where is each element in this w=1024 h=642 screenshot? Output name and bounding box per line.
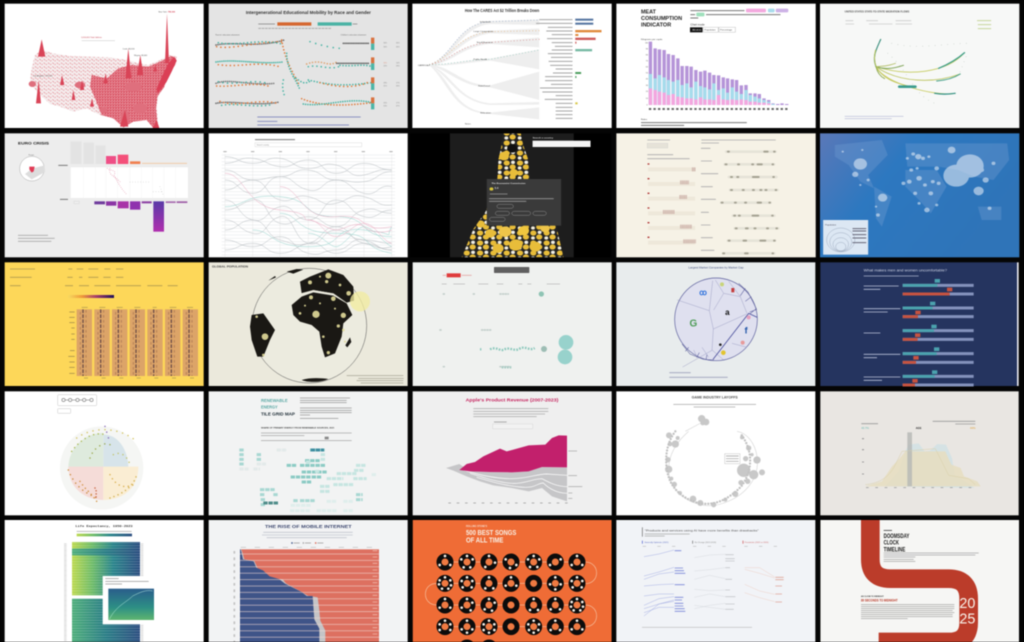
- row headings: [68, 312, 75, 373]
- notes: [641, 118, 747, 125]
- heading: What makes men and women uncomfortable?: [864, 268, 947, 272]
- chart mode selector: Population: [704, 29, 716, 32]
- callout: Wayne label: Wayne: 68,000: [134, 55, 148, 57]
- cluster row of teal glyphs: [480, 348, 535, 350]
- legend box: Population: [825, 223, 837, 226]
- stat columns: 29%: [383, 82, 387, 84]
- chart: year axis: [448, 502, 568, 504]
- heading: UNITED STATES STATE-TO-STATE MIGRATION FLOWS: [845, 10, 909, 13]
- panel: Largest Market Companies voronoi: [616, 262, 815, 386]
- chart: scatter panel: [71, 167, 188, 198]
- row labels and options: [10, 269, 178, 286]
- footnotes: [257, 117, 361, 125]
- tooltip panel: 5.4: [495, 187, 499, 190]
- chart: selected age band: [907, 432, 912, 486]
- stat columns: 14%: [396, 62, 400, 64]
- left stat: [861, 424, 878, 430]
- column heads: Pessimistic (2022 vs 2024): [745, 541, 769, 544]
- title rule: [641, 527, 643, 537]
- heading: TILE GRID MAP: [261, 412, 296, 418]
- year label: [959, 596, 975, 627]
- heading: Largest Market Companies by Market Cap: [688, 266, 744, 270]
- heading: "Products and services using AI have more benefits than drawbacks": [645, 528, 759, 532]
- chart: gray slopes: [694, 554, 725, 609]
- heading: ENERGY: [261, 405, 278, 411]
- branch labels: Small Business: [477, 42, 493, 44]
- notes: Notes: [641, 118, 647, 121]
- heading: Apple's Product Revenue (2007-2023): [466, 397, 559, 402]
- heading: [884, 533, 910, 553]
- search label: Search a country: [533, 137, 554, 140]
- legend box: [823, 220, 868, 255]
- heatmap: lower row texture: [72, 599, 140, 642]
- chart: population bubbles: [842, 147, 995, 217]
- stat columns: 17%: [396, 82, 400, 84]
- heading: TIMELINE: [884, 546, 906, 553]
- stat columns: 22%: [383, 66, 387, 68]
- heading: CLOCK: [884, 540, 899, 547]
- subheading: SHARE OF PRIMARY ENERGY FROM RENEWABLE SOURCES, 2021: [261, 427, 334, 430]
- connector curves: [425, 562, 597, 627]
- y axis ticks: 50: [646, 73, 648, 75]
- chart: iPhone area: [459, 435, 567, 472]
- panel: Renewable Energy tile grid map: [209, 391, 408, 515]
- y axis ticks: 10: [646, 98, 648, 100]
- branch labels: Public Health: [473, 58, 488, 61]
- tooltip: [725, 454, 740, 464]
- legend rule: [82, 40, 115, 42]
- outer halo: [60, 426, 143, 510]
- year label: 25: [959, 611, 975, 627]
- footnote: [845, 116, 903, 119]
- caption: [18, 235, 55, 241]
- map: Europe and Middle East: [300, 269, 354, 303]
- flow legend: [977, 21, 991, 29]
- map: metro blobs: [29, 81, 147, 127]
- big teal bubble 1: [559, 335, 573, 350]
- popup: [103, 576, 157, 624]
- heatmap: dark upper band: [72, 549, 140, 555]
- chart: heatmap columns: [77, 309, 198, 376]
- search input: [533, 141, 591, 147]
- chart: heatmap dark streaks: [83, 309, 189, 376]
- stat columns: 21%: [383, 86, 387, 88]
- chart: blue slopes: [644, 550, 674, 616]
- data points: [68, 426, 137, 501]
- panel: Euro Crisis: [5, 133, 204, 257]
- stat columns: 17%: [396, 102, 400, 104]
- panel: US population spike map: [5, 4, 204, 128]
- panel: circular sector scatter: [5, 391, 204, 515]
- panel: yellow heatmap: [5, 262, 204, 386]
- eyebrow: [884, 529, 892, 532]
- y axis ticks: 40: [646, 79, 648, 81]
- panel: navy gender stereotype bars: [820, 262, 1019, 386]
- axis ticks: [643, 545, 779, 547]
- chart: top bars: [71, 141, 187, 164]
- heading: Intergenerational Educational Mobility by Race and Gender: [246, 10, 371, 15]
- panel: CARES Act tree: [412, 4, 612, 128]
- heading: RENEWABLE: [261, 398, 288, 404]
- branch labels: [473, 21, 493, 114]
- chart: lower bars: [74, 201, 187, 232]
- chart: tree fans: [430, 19, 539, 119]
- dark tooltip: [494, 267, 529, 273]
- chart: blue histogram: [885, 443, 981, 488]
- description and year slider: [261, 433, 352, 441]
- heading: [641, 9, 683, 28]
- subheading: [673, 404, 756, 407]
- globe locator: Europe: [29, 154, 34, 156]
- map: Antarctica and Greenland: [268, 269, 328, 382]
- chart mode selector: Chart mode: [690, 23, 705, 26]
- y axis ticks: 30: [646, 85, 648, 87]
- logo: Meta: ꝏ: [699, 288, 707, 297]
- chart: teal rank curves: [225, 196, 392, 253]
- subheads: Children's education attainment: [341, 34, 367, 37]
- chart: year columns: [225, 154, 392, 257]
- stat columns: 29%: [396, 66, 400, 68]
- chart: red segments: [903, 294, 950, 385]
- footnote: [669, 373, 728, 377]
- heading and search field: Search country: [257, 144, 269, 147]
- panel: Intergenerational Educational Mobility: [209, 4, 408, 128]
- heading: Life Expectancy, 1950-2023: [75, 524, 133, 528]
- heatmap: row texture: [72, 542, 140, 595]
- chart: stream separators: [463, 470, 567, 493]
- row labels: [864, 286, 900, 380]
- map: Africa: [292, 292, 352, 357]
- red selected chip: [443, 273, 472, 277]
- right labels: [536, 20, 573, 118]
- silhouette dark hub: [507, 144, 517, 153]
- footer label: Notes: [465, 122, 471, 125]
- logo: Google: G: [689, 319, 697, 330]
- year label: 20: [959, 596, 975, 612]
- logo: Amazon: a: [725, 308, 730, 317]
- chart: pink rank curves: [225, 173, 392, 243]
- chart: base bars: [903, 285, 974, 385]
- chart: red slopes: [745, 568, 775, 602]
- voronoi circle: [675, 278, 757, 361]
- chart mode selector: Absolute: [692, 29, 702, 32]
- branch labels: Education: [480, 111, 492, 114]
- footnote: [642, 626, 752, 628]
- inner dark chart panel: [450, 133, 574, 257]
- chart: tile map: [239, 450, 376, 511]
- tooltip panel: The Economist Commission: [491, 182, 526, 185]
- section heading: 89 SECONDS TO MIDNIGHT: [861, 599, 898, 603]
- intro text: [473, 409, 548, 417]
- heading: DOOMSDAY: [884, 533, 910, 540]
- quadrant: blue: [103, 435, 128, 468]
- scatter rows: [440, 294, 510, 367]
- subheading: [864, 275, 919, 277]
- right column header: [701, 140, 776, 143]
- right value labels: [373, 551, 377, 634]
- chart: outline: [865, 449, 975, 485]
- heading: OF ALL TIME: [466, 536, 503, 545]
- heading: GAME INDUSTRY LAYOFFS: [692, 395, 738, 400]
- chart: other product streams: [446, 464, 567, 501]
- y axis ticks: 80: [646, 54, 648, 56]
- chart: series labels: [568, 451, 582, 498]
- left strip filters: [648, 163, 696, 243]
- callout: Chicago label: Cook: 84,000: [123, 49, 135, 51]
- subheading: [645, 534, 690, 536]
- map: Madagascar: [345, 337, 351, 347]
- bars: [575, 19, 601, 104]
- stat columns: [383, 42, 400, 108]
- heatmap: upper block: [72, 542, 140, 595]
- callout: legend label: 1,000,000 Total Jobless: [81, 36, 102, 39]
- y axis ticks: 0: [647, 104, 648, 106]
- x axis ticks: [866, 487, 973, 489]
- y axis ticks: 100: [645, 42, 648, 44]
- year marker: [325, 437, 329, 439]
- tooltip panel: [487, 179, 561, 226]
- voronoi cells: [677, 280, 747, 367]
- root label: CARES Act: [418, 64, 430, 67]
- chart mode selector: Percentage: [720, 29, 733, 32]
- heading: THE RISE OF MOBILE INTERNET: [265, 524, 352, 529]
- chart: small bubble ring: [666, 431, 750, 504]
- stat columns: 33%: [396, 86, 400, 88]
- quadrant: green: [68, 433, 103, 468]
- map: eastern county marks: [90, 56, 176, 128]
- map: Mediterranean: [302, 291, 340, 299]
- chart: country flags: [649, 106, 788, 112]
- panel: 500 Best Songs of All Time: [413, 520, 612, 642]
- logo: Tesla-style mark: f: [744, 326, 748, 336]
- quadrant: amber: [103, 467, 138, 500]
- heading and search field: [255, 140, 362, 147]
- stat columns: 25%: [383, 102, 387, 104]
- panel: Meat consumption indicator: [616, 4, 816, 128]
- dropdown: [493, 422, 533, 429]
- chart: yellow histogram: [865, 451, 981, 486]
- column heads: No Change (2022-2024): [695, 542, 716, 544]
- branch labels: State/Local: [478, 85, 490, 88]
- chart: teal segments: [903, 285, 937, 376]
- left controls: [647, 140, 690, 159]
- heading: CONSUMPTION: [641, 15, 683, 22]
- sector boundary: [713, 313, 757, 359]
- red labels: [775, 577, 784, 602]
- heading: GLOBAL POPULATION: [212, 265, 248, 269]
- heading: [261, 398, 296, 418]
- chart: horizontal rank lines: [222, 154, 395, 257]
- stat columns: 35%: [383, 62, 387, 64]
- ring segments: [682, 283, 757, 360]
- axis labels: [442, 283, 560, 285]
- y axis ticks: 60: [646, 67, 648, 69]
- chart: gray rank curves: [225, 157, 392, 254]
- chart: dot rows: [216, 40, 372, 106]
- subheads: [215, 34, 367, 37]
- map: dense eastern population: [90, 56, 176, 128]
- panel: AI benefits slope charts: [616, 520, 815, 642]
- chart: desktop share area: [240, 549, 379, 642]
- caption: [347, 376, 404, 383]
- chart: bubble clusters: [665, 415, 765, 507]
- callout: Los Angeles label: Los Angeles: 125,000: [33, 75, 53, 78]
- chart: spiral connector: [669, 422, 757, 506]
- y axis ticks: [862, 439, 864, 474]
- heading: [466, 529, 517, 544]
- scrollbar: [1017, 262, 1019, 386]
- legend: [77, 531, 132, 536]
- heatmap: lower block: [72, 599, 140, 642]
- y axis ticks: [645, 42, 648, 106]
- panel: Global population globe: [209, 262, 408, 386]
- heading: 500 BEST SONGS: [466, 528, 516, 537]
- quadrant: red: [68, 467, 103, 500]
- panel: Life Expectancy heatmap: [5, 520, 204, 642]
- small teal bubble: [539, 291, 544, 297]
- map: United States base: [30, 50, 177, 128]
- chart: axis ticks: [223, 150, 393, 153]
- panel: bump chart: [209, 133, 408, 257]
- right stat: 44%: [970, 426, 976, 430]
- panel: Doomsday Clock Timeline: [820, 516, 1019, 642]
- blue labels: [675, 551, 685, 611]
- panel: Game Industry Layoffs: [616, 391, 815, 515]
- small gray bubble: [541, 346, 547, 352]
- intro: [262, 532, 353, 538]
- center label: AGE: [916, 426, 922, 430]
- y axis ticks: 90: [646, 48, 648, 50]
- column heads: Generally Optimistic (2022): [644, 541, 669, 544]
- panel: overlapping histogram: [820, 391, 1019, 515]
- chart: gold bubble silhouette: [461, 133, 571, 257]
- globe outline: [252, 268, 367, 383]
- heading: INDICATOR: [641, 22, 672, 28]
- chart: other share band: [240, 549, 325, 642]
- chart: mobile share area: [240, 549, 319, 642]
- left stat: 43.7%: [861, 426, 869, 430]
- x axis: [241, 546, 381, 548]
- stat columns: 16%: [383, 106, 387, 108]
- chart: population bubbles: [255, 273, 370, 356]
- filter controls: [845, 21, 912, 24]
- heading: How The CARES Act $2 Trillion Breaks Down: [465, 8, 539, 14]
- teal cluster: [502, 364, 512, 371]
- panel: light scatter clusters: [413, 262, 612, 386]
- chart: row separators: [240, 549, 379, 642]
- map faint state dots: [888, 43, 970, 103]
- panel: world bubble map: [820, 133, 1019, 257]
- filter box: [58, 395, 97, 406]
- intro text: [300, 398, 352, 418]
- panel: cream strip charts: [616, 133, 816, 257]
- intro text with highlighted chips: [690, 9, 788, 18]
- chart: end stacked bars: [368, 38, 378, 109]
- reset button: [58, 409, 71, 413]
- gray labels: [725, 555, 735, 609]
- y axis ticks: 20: [646, 91, 648, 93]
- subheads: Parents' education attainment: [215, 34, 240, 37]
- chart mode selector: [690, 23, 735, 32]
- map: land masses: [835, 140, 1009, 227]
- stat columns: 30%: [383, 42, 387, 44]
- legend bars: [258, 22, 357, 28]
- panel: Apple's Product Revenue: [413, 391, 612, 515]
- column heads: [642, 541, 769, 544]
- chart: stacked bars: [650, 42, 787, 105]
- axis labels: [58, 165, 68, 199]
- section body: [861, 605, 954, 619]
- stat columns: 30%: [396, 42, 400, 44]
- branch labels: Large Corporations: [473, 30, 493, 33]
- stat columns: 30%: [383, 46, 387, 48]
- panel: Economist bubble silhouette on black: [450, 132, 592, 258]
- intro text: [884, 553, 979, 561]
- donut track dots: [438, 555, 584, 634]
- stat columns: 30%: [396, 46, 400, 48]
- map: west county marks: [30, 50, 177, 128]
- branch labels: Individuals: [480, 21, 491, 23]
- y axis title: Kilograms per capita: [641, 38, 663, 41]
- y axis ticks: 70: [646, 60, 648, 62]
- donut grid: [439, 556, 583, 642]
- panel: State-to-state migration flows: [820, 4, 1019, 128]
- column headings: [82, 307, 194, 378]
- panel: The Rise of Mobile Internet: [209, 520, 408, 642]
- color legend: [68, 295, 114, 298]
- heading: EURO CRISIS: [18, 140, 49, 145]
- chart: colored stream dots: [430, 20, 539, 65]
- row labels: [65, 543, 142, 641]
- eyebrow: ROLLING STONE'S: [466, 526, 488, 528]
- year labels: [232, 551, 237, 642]
- chart: migration arcs: [874, 39, 965, 94]
- map: South America: [250, 313, 275, 357]
- donut hole fill: [442, 559, 580, 630]
- small logos: [719, 282, 751, 355]
- heading: MEAT: [641, 9, 656, 15]
- red timeline track: [870, 516, 969, 642]
- section kicker: AS CLOSE TO MIDNIGHT: [861, 595, 885, 598]
- big teal bubble 2: [558, 350, 572, 364]
- chart: heatmap mid streaks: [80, 310, 192, 376]
- stat columns: 37%: [396, 106, 400, 108]
- chart: population spikes: [36, 13, 169, 128]
- legend: [291, 542, 323, 544]
- right strips: [701, 148, 778, 253]
- map: east coast dense band: [157, 57, 177, 93]
- callout: New York label: New York: 795,000: [158, 10, 176, 13]
- chart: value flags: [912, 279, 952, 383]
- globe locator: [20, 154, 45, 181]
- right stat: [933, 421, 976, 430]
